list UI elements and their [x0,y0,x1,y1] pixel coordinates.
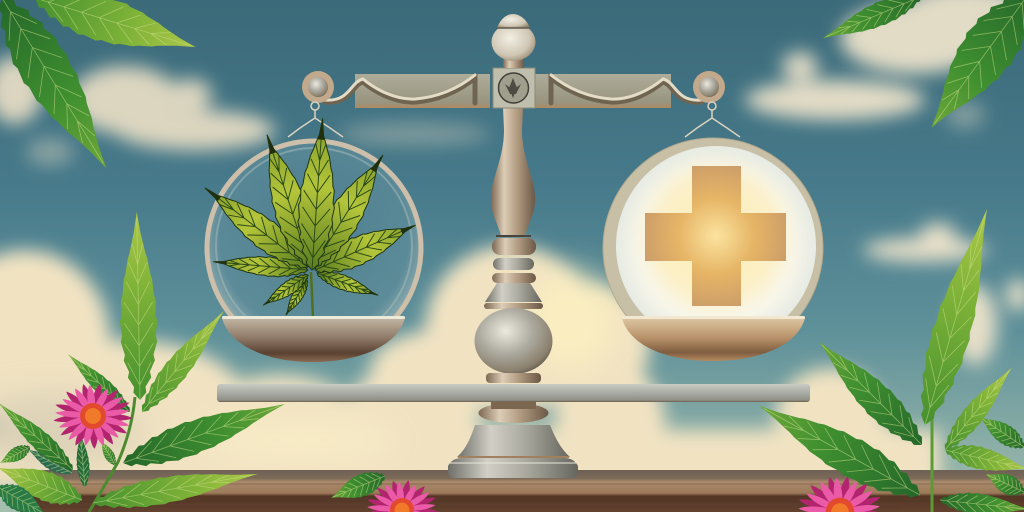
medical cross [645,166,786,306]
right globe [603,138,823,361]
scale base [448,402,578,478]
cloud: middle right [863,223,1024,365]
centre block with emblem [493,68,535,108]
flower: pink right [796,476,884,512]
platform bar [217,384,810,402]
cannabis leaf [196,117,421,318]
hanger: right [685,102,740,137]
flower: pink centre [365,480,439,512]
finial [492,14,536,68]
plant: bottom right [749,203,1024,512]
plant: top right leaves [818,0,1024,144]
cloud: upper left [0,56,490,166]
beam end balls [302,71,334,103]
scale column [474,108,552,383]
cloud: upper right [745,0,1024,129]
scroll ornaments [325,75,701,103]
plant: bottom left [0,212,291,512]
scale [196,14,823,478]
left globe [196,117,421,362]
beam [302,71,725,108]
hanger: left [288,102,343,137]
cloud shading [0,270,615,465]
left bowl [222,318,405,362]
wooden table [20,470,1024,512]
plant: bottom centre [327,465,439,512]
flower: pink left [53,383,133,449]
cloud: lower bank [0,245,940,490]
plant: top left leaves [0,0,202,182]
right bowl [622,318,805,361]
cross glow [646,166,786,306]
